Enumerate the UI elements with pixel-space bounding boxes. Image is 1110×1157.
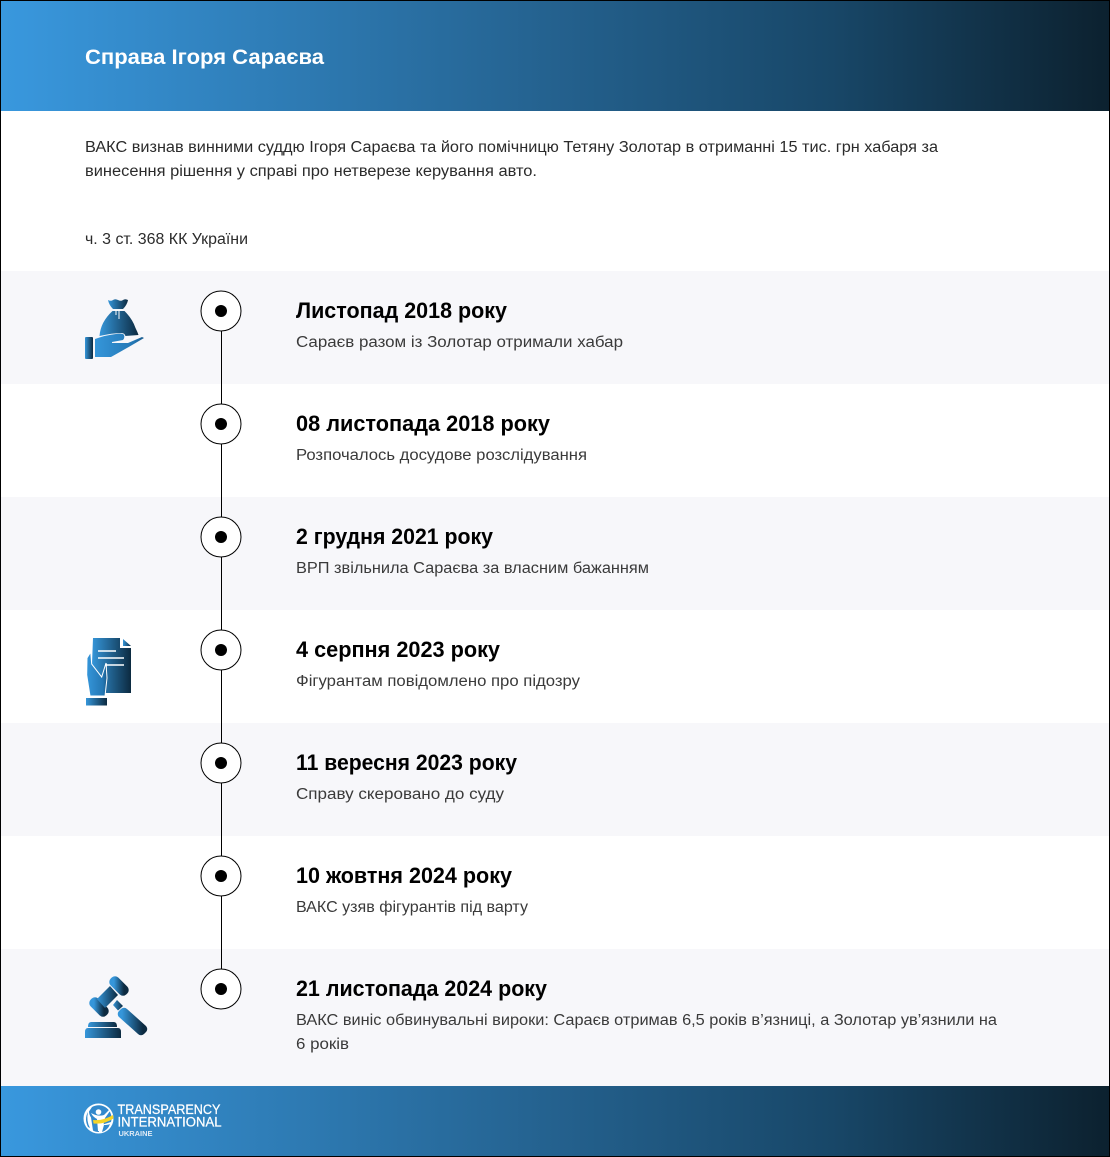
- event 1: Сараєв разом із Золотар отримали хабар: [296, 334, 623, 351]
- marker 3: [201, 517, 241, 557]
- event 5: [296, 750, 518, 803]
- intro text: винесення рішення у справі про нетверезе керування авто.: [85, 163, 537, 180]
- marker 7: [201, 969, 241, 1009]
- event 3: ВРП звільнила Сараєва за власним бажанням: [296, 560, 649, 577]
- event 5: 11 вересня 2023 року: [296, 750, 518, 775]
- event 2: [296, 411, 587, 464]
- logo: Transparency International Ukraine: UKRAINE: [118, 1129, 152, 1138]
- header band: [1, 1, 1109, 111]
- event 6: ВАКС узяв фігурантів під варту: [296, 899, 528, 916]
- intro text: ВАКС визнав винними суддю Ігоря Сараєва та його помічницю Тетяну Золотар в отриманні 15 тис. грн хабаря за: [85, 139, 938, 156]
- event 3: 2 грудня 2021 року: [296, 524, 494, 549]
- row backgrounds: [1, 271, 1109, 1086]
- marker 6: [201, 856, 241, 896]
- event 7: ВАКС виніс обвинувальні вироки: Сараєв отримав 6,5 років в’язниці, а Золотар ув’язнили на: [296, 1012, 997, 1029]
- footer band: [1, 1086, 1109, 1156]
- marker 4: [201, 630, 241, 670]
- event 7: 6 років: [296, 1036, 349, 1053]
- icon: hand holding document: [86, 638, 131, 706]
- timeline line: [220, 311, 222, 989]
- icon: gavel: [85, 981, 143, 1038]
- event 2: Розпочалось досудове розслідування: [296, 447, 587, 464]
- legal article: ч. 3 ст. 368 КК України: [85, 231, 248, 248]
- event 4: [296, 637, 580, 690]
- event 4: 4 серпня 2023 року: [296, 637, 501, 662]
- event 4: Фігурантам повідомлено про підозру: [296, 673, 580, 690]
- event 2: 08 листопада 2018 року: [296, 411, 551, 436]
- event 1: Листопад 2018 року: [296, 298, 508, 323]
- event 7: 21 листопада 2024 року: [296, 976, 548, 1001]
- logo: Transparency International Ukraine: TRANSPARENCY: [118, 1102, 220, 1117]
- icon: money bag on hand: [85, 299, 144, 359]
- event 7: [296, 976, 997, 1053]
- event 5: Справу скеровано до суду: [296, 786, 504, 803]
- marker 2: [201, 404, 241, 444]
- title: Справа Ігоря Сараєва: [85, 46, 324, 69]
- event 3: [296, 524, 649, 577]
- logo: Transparency International Ukraine: INTERNATIONAL: [118, 1114, 222, 1130]
- event 6: [296, 863, 528, 916]
- event 6: 10 жовтня 2024 року: [296, 863, 513, 888]
- intro text: [85, 139, 938, 180]
- logo: Transparency International Ukraine: [84, 1102, 222, 1138]
- event 1: [296, 298, 623, 351]
- marker 5: [201, 743, 241, 783]
- marker 1: [201, 291, 241, 331]
